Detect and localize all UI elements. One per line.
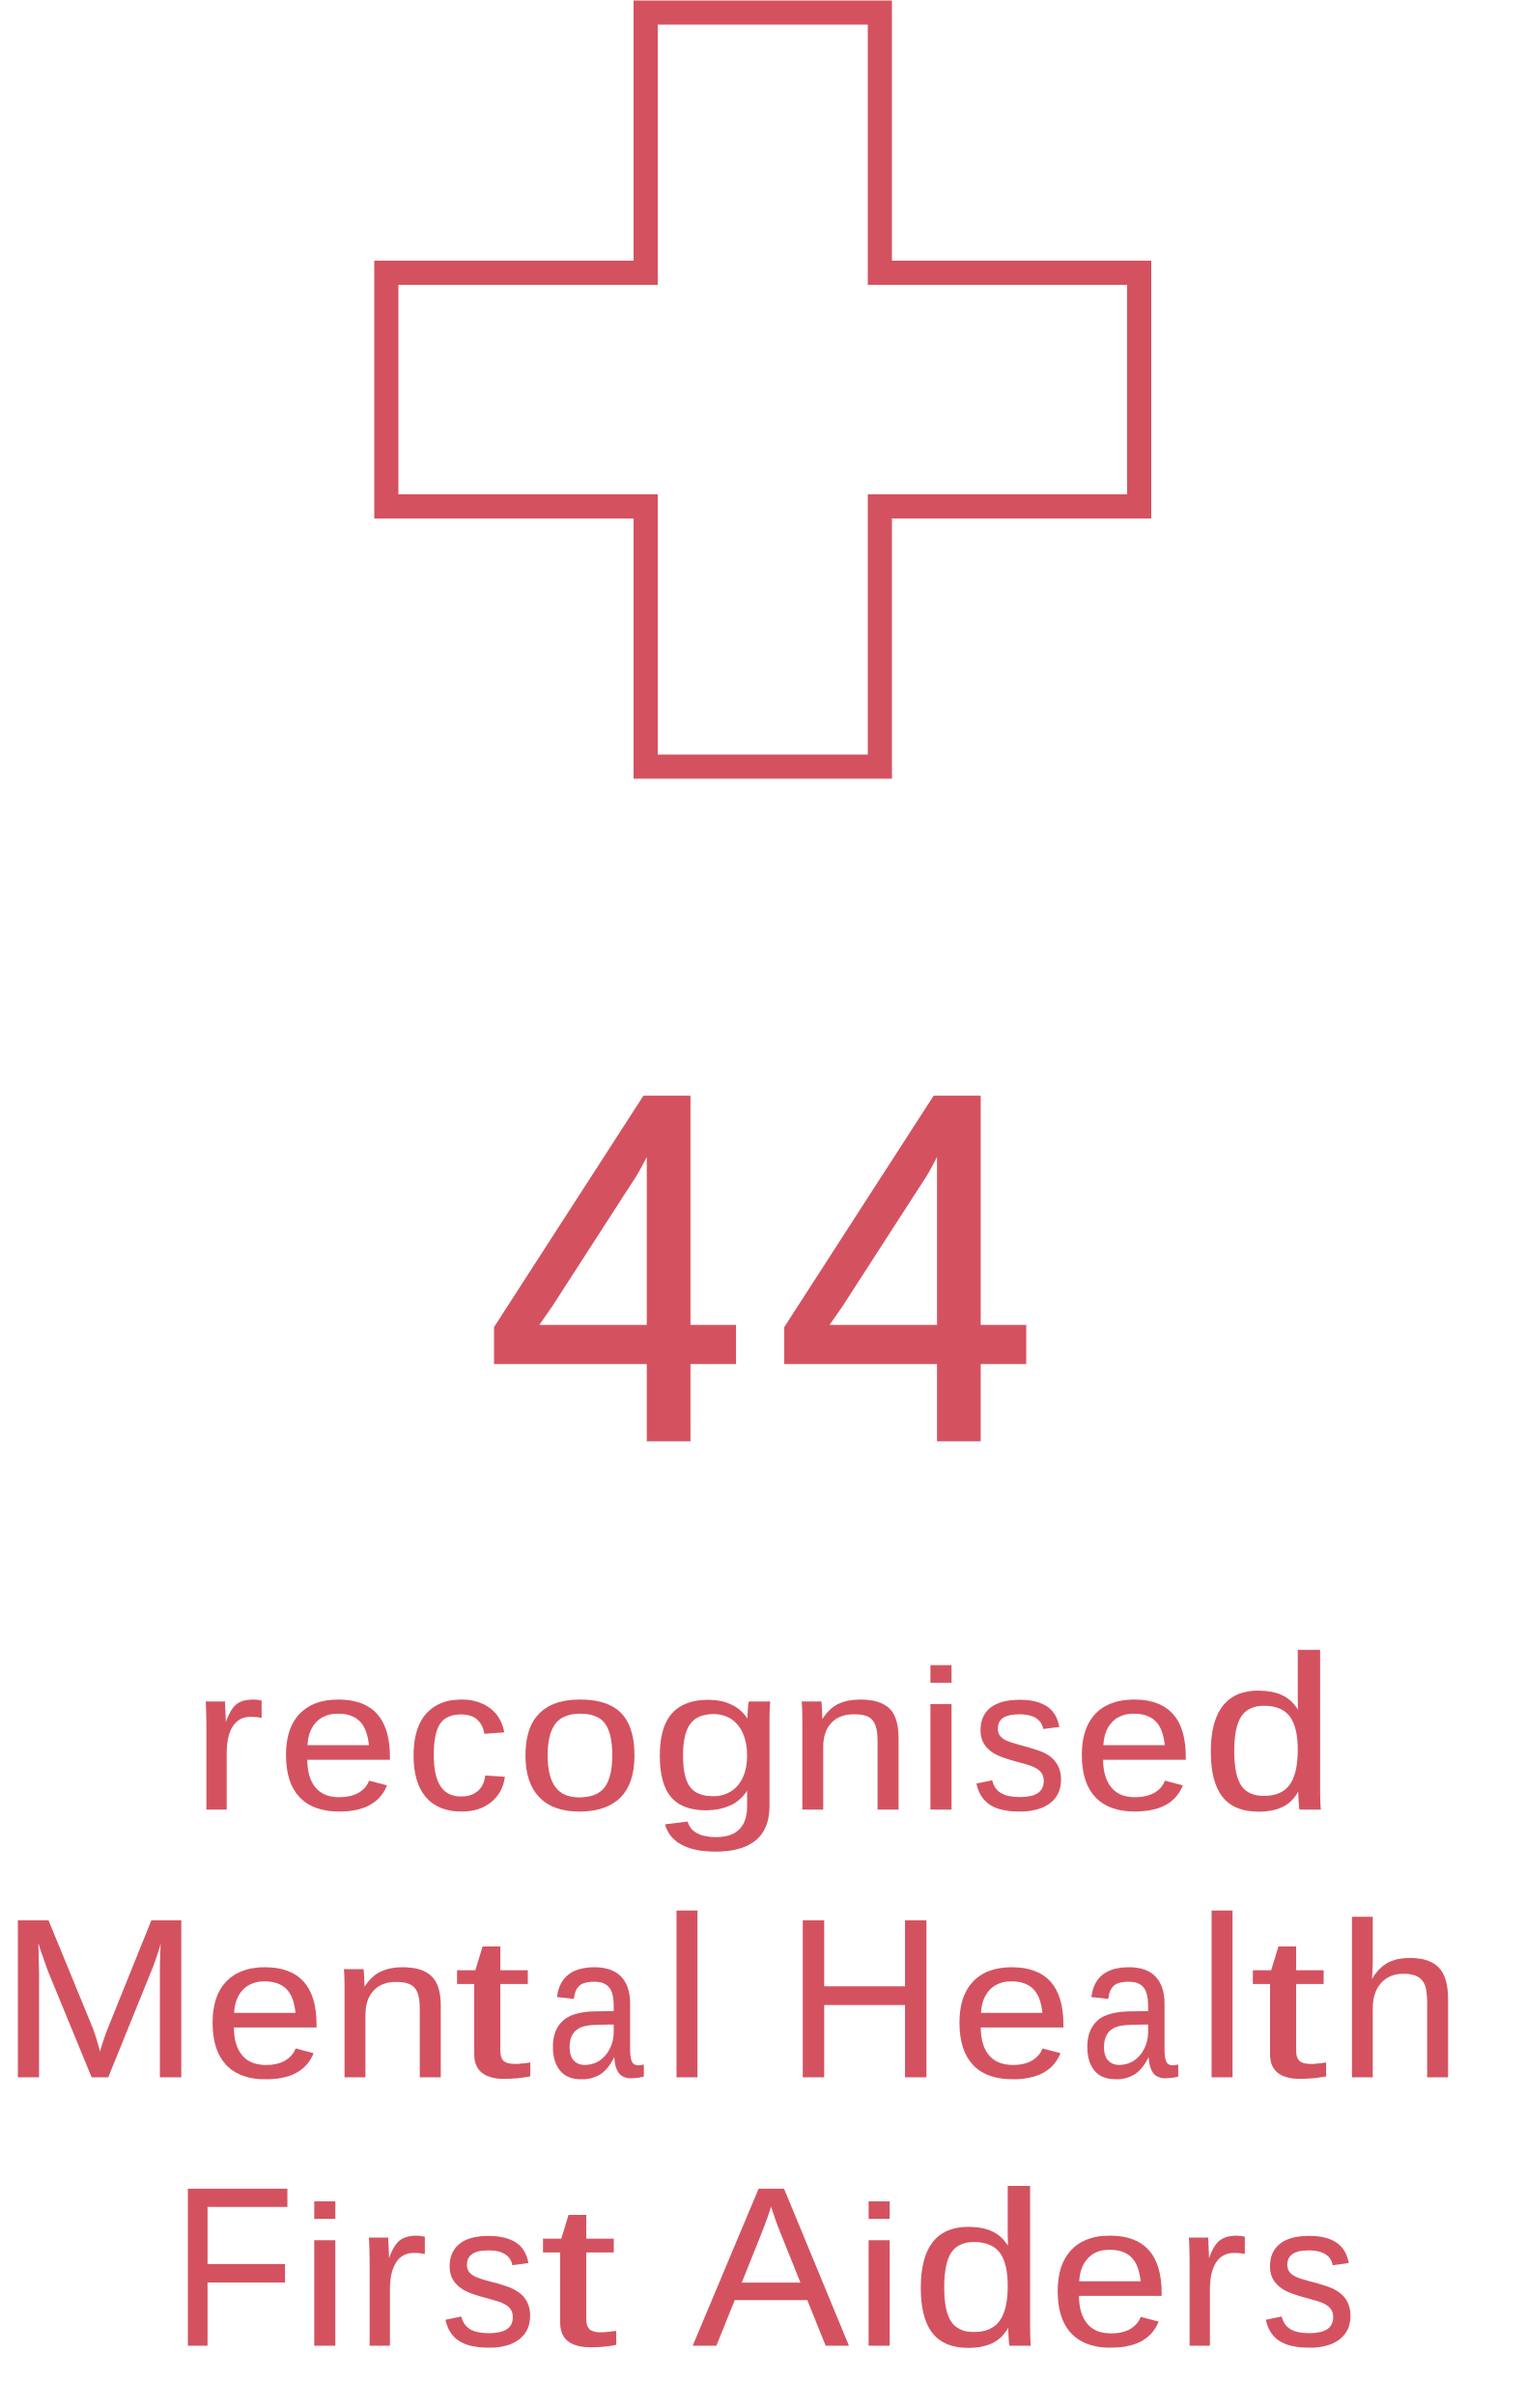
caption line: First Aiders: F bbox=[172, 2140, 296, 2394]
caption line: Mental Health: M bbox=[0, 1871, 201, 2125]
caption line: First Aiders: r bbox=[355, 2162, 428, 2389]
caption line: Mental Health: h bbox=[1337, 1879, 1462, 2124]
caption line: recognised: e bbox=[1073, 1626, 1195, 1853]
caption text block bbox=[0, 1612, 1462, 2394]
caption line: Mental Health: n bbox=[329, 1893, 455, 2120]
caption line: Mental Health: t bbox=[1250, 1896, 1327, 2120]
caption line: Mental Health: e bbox=[950, 1893, 1073, 2120]
icon: outlined medical cross bbox=[386, 13, 1140, 767]
caption line: Mental Health: l bbox=[1197, 1870, 1247, 2126]
caption line: Mental Health: H bbox=[785, 1871, 944, 2125]
caption line: recognised: s bbox=[972, 1626, 1067, 1853]
caption line: recognised: r bbox=[191, 1626, 265, 1853]
caption line: First Aiders: s bbox=[1261, 2162, 1357, 2389]
caption line: Mental Health: a bbox=[546, 1893, 643, 2120]
caption line: recognised: d bbox=[1201, 1612, 1336, 1857]
caption line: Mental Health: a bbox=[1080, 1893, 1178, 2120]
caption line: Mental Health: e bbox=[204, 1893, 325, 2120]
caption line: First Aiders: t bbox=[539, 2165, 618, 2389]
caption line: First Aiders: s bbox=[440, 2162, 537, 2389]
caption line: First Aiders: e bbox=[1049, 2162, 1171, 2389]
caption line: recognised: i bbox=[916, 1631, 966, 1852]
big number: 44 bbox=[486, 991, 1037, 1544]
caption line: recognised: e bbox=[277, 1626, 399, 1853]
big number: 44: 4 bbox=[776, 991, 1037, 1544]
caption line: Mental Health: l bbox=[662, 1870, 712, 2126]
caption line: First Aiders: i bbox=[299, 2167, 350, 2388]
big number: 44: 4 bbox=[486, 991, 748, 1544]
caption line: First Aiders: A bbox=[693, 2140, 849, 2394]
caption line: recognised: n bbox=[787, 1626, 913, 1853]
caption line: recognised: o bbox=[517, 1626, 643, 1853]
caption line: recognised: g bbox=[650, 1626, 785, 1853]
caption line: First Aiders: r bbox=[1174, 2162, 1248, 2389]
caption line: recognised: c bbox=[406, 1626, 510, 1853]
caption line: First Aiders: i bbox=[854, 2167, 904, 2388]
caption line: First Aiders: d bbox=[911, 2148, 1046, 2393]
caption line: Mental Health: t bbox=[454, 1896, 531, 2120]
